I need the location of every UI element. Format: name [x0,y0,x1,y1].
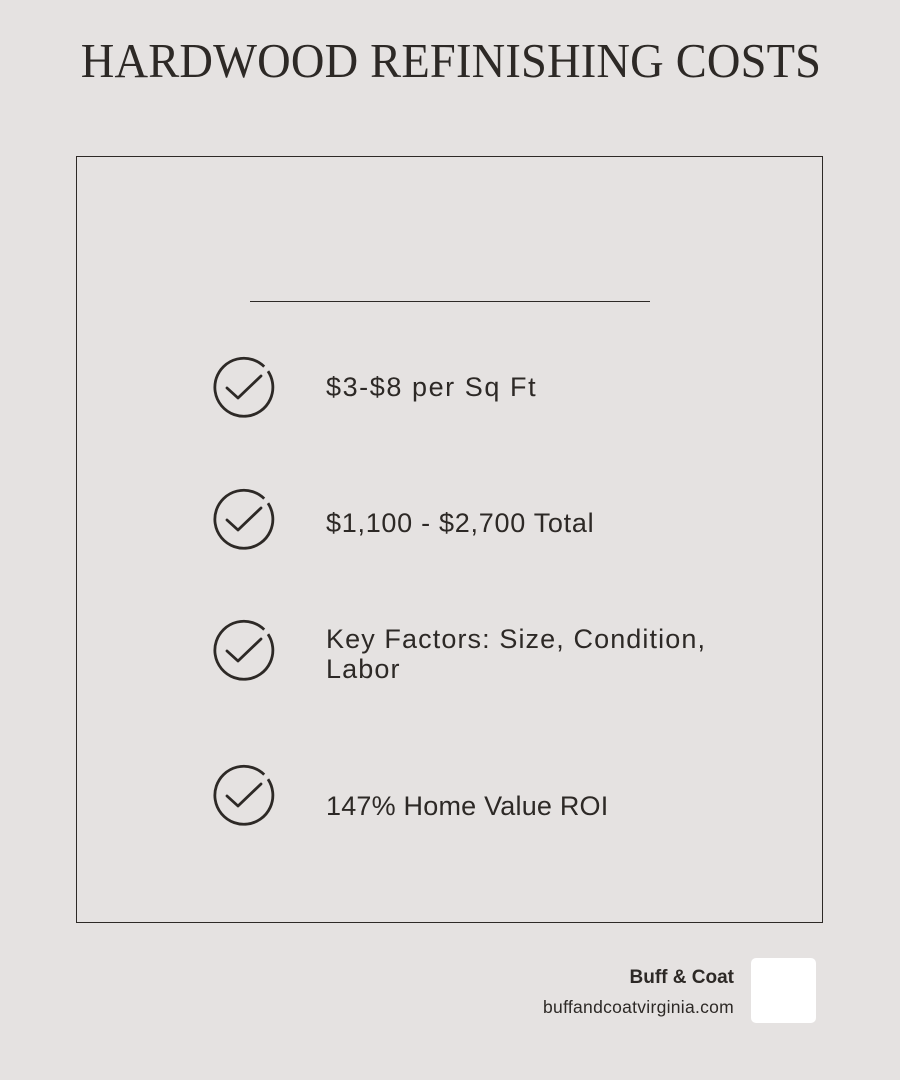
icon: check 4 [213,764,274,826]
icon: check 2 [213,488,274,550]
text: price per square foot: $3-$8 per Sq Ft [326,372,537,402]
brand name: Buff & Coat [630,967,734,988]
icon: check 3 [213,620,274,681]
title: HARDWOOD REFINISHING COSTS [81,33,821,88]
divider line [250,301,650,302]
website url: buffandcoatvirginia.com [543,997,734,1017]
logo placeholder [751,958,816,1023]
text: key factors [326,624,706,684]
icon: check 1 [213,356,274,418]
text: key factors: Labor [326,654,401,684]
panel: cost summary [76,156,823,923]
text: home value ROI: 147% Home Value ROI [326,791,608,821]
text: key factors: Key Factors: Size, Condition, [326,624,706,654]
text: total cost: $1,100 - $2,700 Total [326,508,594,538]
